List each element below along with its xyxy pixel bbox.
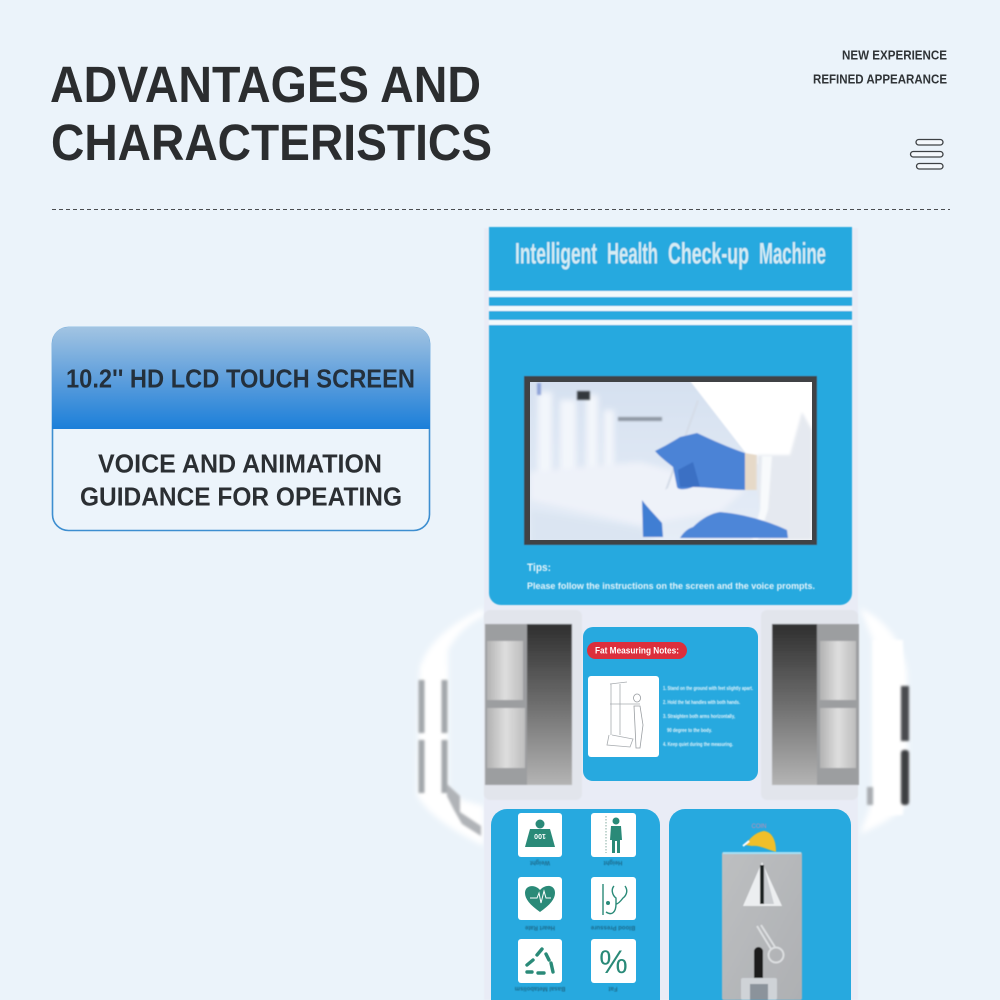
icon captions: Basal Metabolism — [515, 985, 565, 991]
key slot — [754, 947, 763, 983]
icon: basal metabolism — [518, 939, 562, 983]
notes list: 90 degree to the body. — [667, 728, 713, 734]
machine title: Check-up — [668, 238, 749, 270]
tagline: NEW EXPERIENCE — [842, 48, 947, 62]
glove lower — [642, 500, 663, 537]
sleeve — [745, 453, 757, 490]
notes list — [663, 686, 753, 748]
left tissue compartment — [484, 610, 582, 800]
panel body — [52, 328, 430, 530]
notes badge: Fat Measuring Notes: — [595, 646, 679, 656]
notes list: 3. Straighten both arms horizontally, — [663, 714, 736, 720]
pen — [666, 416, 692, 490]
icon captions: Weight — [530, 859, 550, 865]
title: ADVANTAGES AND — [50, 56, 481, 113]
machine body — [484, 228, 858, 1000]
title — [50, 56, 492, 171]
key symbol — [757, 925, 784, 962]
icon: percent: % — [599, 944, 628, 980]
tips text — [527, 562, 815, 592]
machine title: Health — [607, 238, 658, 270]
icon captions: Height — [604, 859, 622, 865]
machine title — [515, 238, 826, 270]
panel: fat measuring notes — [583, 627, 758, 781]
title: CHARACTERISTICS — [51, 114, 492, 171]
lab equipment — [536, 382, 663, 422]
icon: yellow hand: COIN — [752, 824, 766, 830]
top display panel — [489, 227, 852, 605]
description text — [80, 448, 402, 512]
table — [530, 462, 745, 525]
machine title: Intelligent — [515, 238, 597, 270]
description text: GUIDANCE FOR OPEATING — [80, 482, 402, 512]
panel: coin slot — [669, 809, 851, 1000]
notes list: 1. Stand on the ground with feet slightly apart. — [663, 686, 753, 692]
knob — [741, 978, 777, 1000]
notes badge — [587, 642, 687, 659]
bright background — [690, 382, 812, 540]
right handle — [860, 608, 909, 834]
machine title: Machine — [759, 238, 826, 270]
screen photo — [525, 377, 817, 545]
header text: 10.2'' HD LCD TOUCH SCREEN — [66, 364, 415, 394]
lower display panel — [489, 325, 852, 605]
icon: yellow hand — [743, 824, 776, 852]
bottles — [536, 390, 616, 472]
notes illustration — [588, 676, 659, 757]
notes list: 4. Keep quiet during the measuring. — [663, 742, 734, 748]
description text: VOICE AND ANIMATION — [98, 448, 382, 478]
icon captions — [515, 859, 635, 991]
icon: percent — [591, 939, 636, 983]
icon: menu lines — [910, 140, 943, 169]
icon: weight — [518, 813, 562, 857]
left handle — [417, 608, 484, 846]
icon: heart rate — [518, 877, 562, 920]
tagline: REFINED APPEARANCE — [813, 72, 947, 86]
icon: weight: 100 — [534, 832, 546, 839]
header band — [489, 227, 852, 291]
icon: height — [591, 813, 636, 857]
notes list: 2. Hold the fat handles with both hands. — [663, 700, 740, 706]
metal plate — [722, 852, 802, 1000]
glove upper — [655, 433, 745, 490]
screen bezel — [524, 376, 817, 545]
icon captions: Heart Rate — [524, 924, 555, 930]
coin slot funnel — [743, 862, 782, 906]
panel header — [52, 327, 430, 429]
panel: measurement icons — [491, 809, 660, 1000]
icon: blood pressure — [591, 877, 636, 920]
tips text: Please follow the instructions on the screen and the voice prompts. — [527, 581, 815, 592]
machine — [417, 227, 909, 1000]
icon captions: Fat — [608, 985, 618, 991]
icon captions: Blood Pressure — [590, 924, 635, 930]
panel: touch screen feature — [52, 327, 430, 530]
tips text: Tips: — [527, 562, 551, 574]
right tissue compartment — [761, 610, 859, 800]
tagline — [813, 48, 947, 86]
